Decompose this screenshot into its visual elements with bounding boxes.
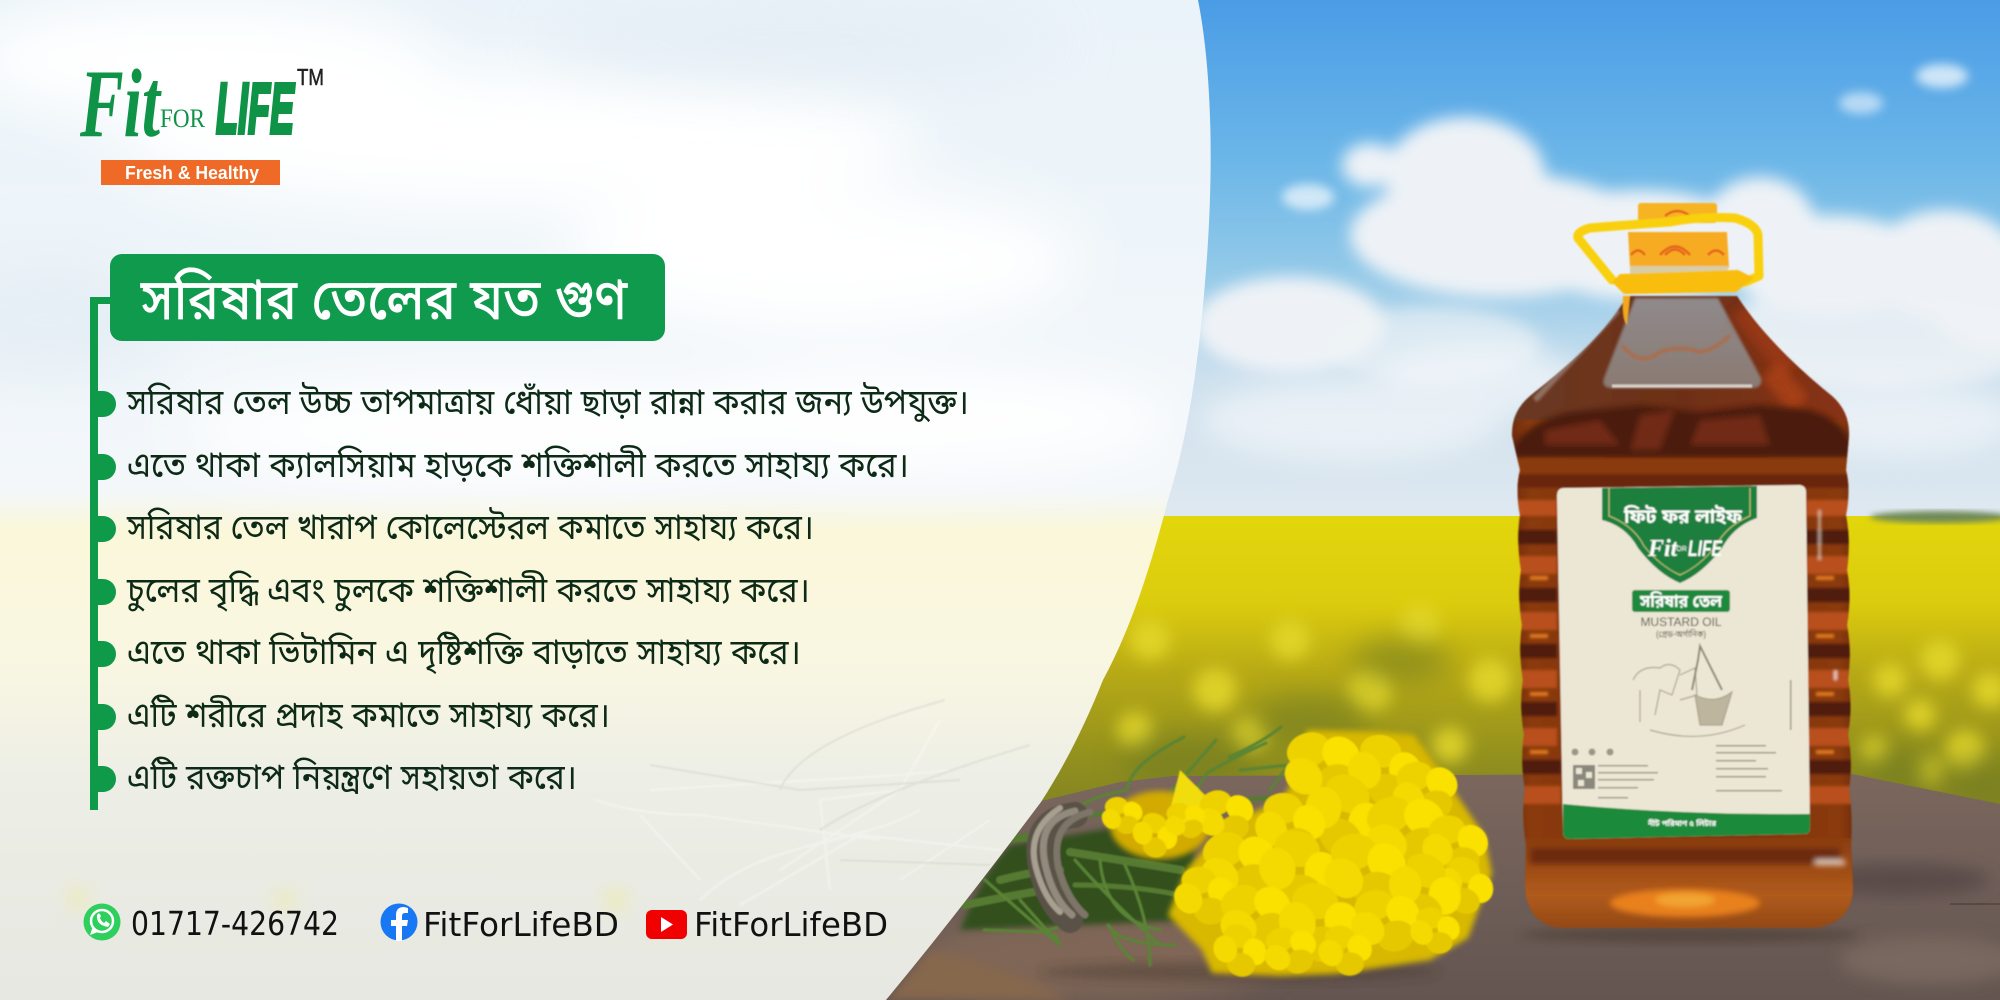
icon: facebook — [380, 904, 418, 941]
contact: Facebook: FitForLifeBD — [423, 905, 619, 944]
flower stems — [960, 727, 1300, 965]
timeline rail with bullets — [90, 297, 116, 810]
label badge: ফিট ফর লাইফ — [1623, 504, 1742, 528]
tree reflection band — [1510, 405, 1855, 458]
bottle cap — [1628, 203, 1729, 274]
label badge: Fit — [1647, 536, 1679, 562]
logo tagline: Fresh & Healthy — [125, 163, 259, 183]
mustard flower bouquet — [960, 716, 1507, 990]
yellow petals — [1093, 716, 1507, 990]
twine knot — [1034, 808, 1090, 920]
bottle body — [1500, 290, 1870, 940]
label small print — [1572, 680, 1792, 798]
oil bottle — [1500, 203, 1870, 940]
benefits list: এতে থাকা ক্যালসিয়াম হাড়কে শক্তিশালী করতে সাহায্য করে। — [127, 445, 909, 485]
heading — [110, 254, 665, 341]
label product name: (গ্রেড-অর্গানিক) — [1656, 628, 1706, 639]
label illustration: ox and oil press — [1633, 646, 1745, 736]
cap collar plate — [1612, 270, 1754, 294]
logo: Fit For Life — [79, 50, 324, 185]
label badge — [1602, 486, 1757, 583]
contact: WhatsApp phone: 01717-426742 — [131, 904, 339, 943]
background photo: mustard field — [0, 511, 2000, 826]
benefits list: এটি রক্তচাপ নিয়ন্ত্রণে সহায়তা করে। — [127, 757, 577, 797]
logo: Fit For Life: Fit — [79, 50, 162, 158]
product label — [1557, 485, 1810, 839]
bottle shoulder — [1505, 290, 1855, 420]
benefits list: এটি শরীরে প্রদাহ কমাতে সাহায্য করে। — [127, 695, 610, 735]
bouquet shadow — [1040, 962, 1440, 982]
logo: Fit For Life: TM — [297, 64, 324, 90]
drip on bottle neck — [1623, 296, 1630, 325]
label product name: সরিষার তেল — [1639, 591, 1723, 611]
icon: youtube — [646, 910, 687, 939]
side ribs — [1515, 500, 1856, 804]
logo: Fit For Life: LIFE — [216, 70, 295, 149]
icon: whatsapp — [84, 904, 120, 940]
bottle base — [1524, 838, 1854, 928]
logo: Fit For Life: FOR — [160, 104, 206, 133]
wooden stump — [880, 773, 2000, 1000]
benefits list: সরিষার তেল খারাপ কোলেস্টেরল কমাতে সাহায্য করে। — [126, 507, 814, 547]
heading: সরিষার তেলের যত গুণ — [140, 267, 628, 332]
yellow carry handle — [1578, 218, 1759, 282]
left white overlay panel — [0, 0, 1300, 1000]
label product name — [1632, 590, 1730, 639]
benefits list: চুলের বৃদ্ধি এবং চুলকে শক্তিশালী করতে সাহায্য করে। — [126, 570, 810, 612]
benefits list — [126, 382, 969, 797]
product label: নীট পরিমাণ ৫ লিটার — [1647, 819, 1716, 828]
contact: YouTube: FitForLifeBD — [694, 905, 888, 944]
background photo: sky and clouds — [0, 0, 2000, 530]
logo tagline — [101, 160, 280, 185]
label badge: LIFE — [1688, 536, 1723, 561]
label product name: MUSTARD OIL — [1640, 615, 1722, 629]
benefits list: সরিষার তেল উচ্চ তাপমাত্রায় ধোঁয়া ছাড়া রান্না করার জন্য উপযুক্ত। — [126, 382, 969, 422]
benefits list: এতে থাকা ভিটামিন এ দৃষ্টিশক্তি বাড়াতে সাহায্য করে। — [127, 632, 801, 674]
label badge: FOR — [1672, 546, 1687, 553]
